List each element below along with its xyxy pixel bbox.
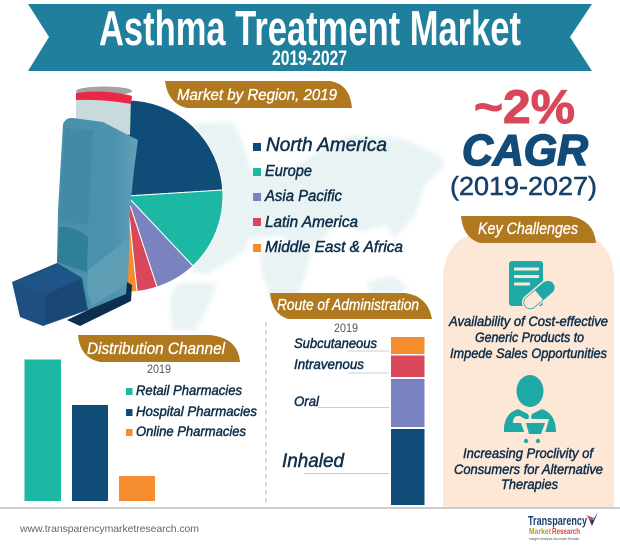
heading: route of administration: Route of Administration: [277, 297, 419, 314]
heading: key challenges: Key Challenges: [478, 219, 578, 238]
stacked bar: route of administration: [391, 337, 424, 505]
slice: North America: [127, 100, 223, 196]
CAGR callout: ~2%: [474, 80, 575, 133]
logo: Transparency Market Research: Market: [529, 527, 551, 536]
heading: route of administration: [270, 293, 432, 319]
legend: distribution channel: [126, 382, 257, 439]
logo: Transparency Market Research: Transparency: [528, 513, 588, 528]
legend: regions: [253, 135, 403, 256]
labels: route of administration: Oral: [294, 393, 320, 409]
CAGR callout: (2019-2027): [450, 171, 597, 201]
heading: key challenges: [461, 216, 596, 243]
legend: regions: Middle East & Africa: [265, 239, 403, 256]
icon: document and pill: [509, 261, 558, 313]
labels: route of administration: [282, 335, 389, 474]
icon: inhaler: [12, 86, 138, 326]
pie chart: market by region: [122, 100, 223, 292]
legend: distribution channel: Online Pharmacies: [136, 423, 246, 439]
text: challenge one: Generic Products to: [475, 329, 584, 345]
legend: distribution channel: Retail Pharmacies: [136, 382, 242, 398]
legend: regions: Europe: [265, 163, 312, 180]
heading: distribution channel: Distribution Channel: [87, 339, 226, 358]
slice: Asia Pacific: [127, 196, 193, 287]
text: challenge two: Increasing Proclivity of: [463, 445, 595, 461]
logo: Transparency Market Research: Insight Analysis Accurate Results: [529, 536, 579, 541]
legend: regions: Asia Pacific: [264, 188, 342, 205]
logo: Transparency Market Research: Research: [552, 527, 580, 536]
slice: Latin America: [127, 196, 157, 292]
text: challenge one: [448, 313, 608, 361]
labels: route of administration: Inhaled: [282, 451, 345, 472]
legend: regions: North America: [266, 135, 387, 156]
world map background: [170, 122, 445, 330]
subtitle years: 2019-2027: [272, 47, 347, 70]
panel: key challenges: [443, 216, 614, 507]
text: challenge two: Therapies: [501, 476, 558, 492]
labels: route of administration: Intravenous: [294, 356, 364, 372]
bar chart: distribution channel: [24, 360, 155, 501]
CAGR callout: CAGR: [462, 126, 588, 175]
CAGR callout: [450, 80, 597, 201]
slice: Middle East and Africa: [122, 196, 137, 292]
legend: regions: Latin America: [265, 214, 358, 231]
icon: consumer with cart: [504, 375, 556, 443]
text: challenge one: Availability of Cost-effective: [448, 313, 608, 329]
footer website url: www.transparencymarketresearch.com: [19, 523, 199, 535]
heading: distribution channel: [78, 335, 240, 362]
year label: distribution: 2019: [147, 362, 171, 376]
labels: route of administration: Subcutaneous: [294, 335, 377, 351]
slice: Europe: [127, 190, 223, 266]
text: challenge two: [454, 445, 603, 492]
header banner: [28, 2, 592, 71]
heading: market by region: Market by Region, 2019: [177, 87, 337, 104]
logo: Transparency Market Research: [528, 512, 598, 541]
year label: route: 2019: [334, 321, 358, 335]
heading: market by region: [165, 81, 352, 108]
text: challenge two: Consumers for Alternative: [454, 461, 603, 477]
legend: distribution channel: Hospital Pharmacies: [136, 403, 257, 419]
text: challenge one: Impede Sales Opportunities: [450, 345, 607, 361]
